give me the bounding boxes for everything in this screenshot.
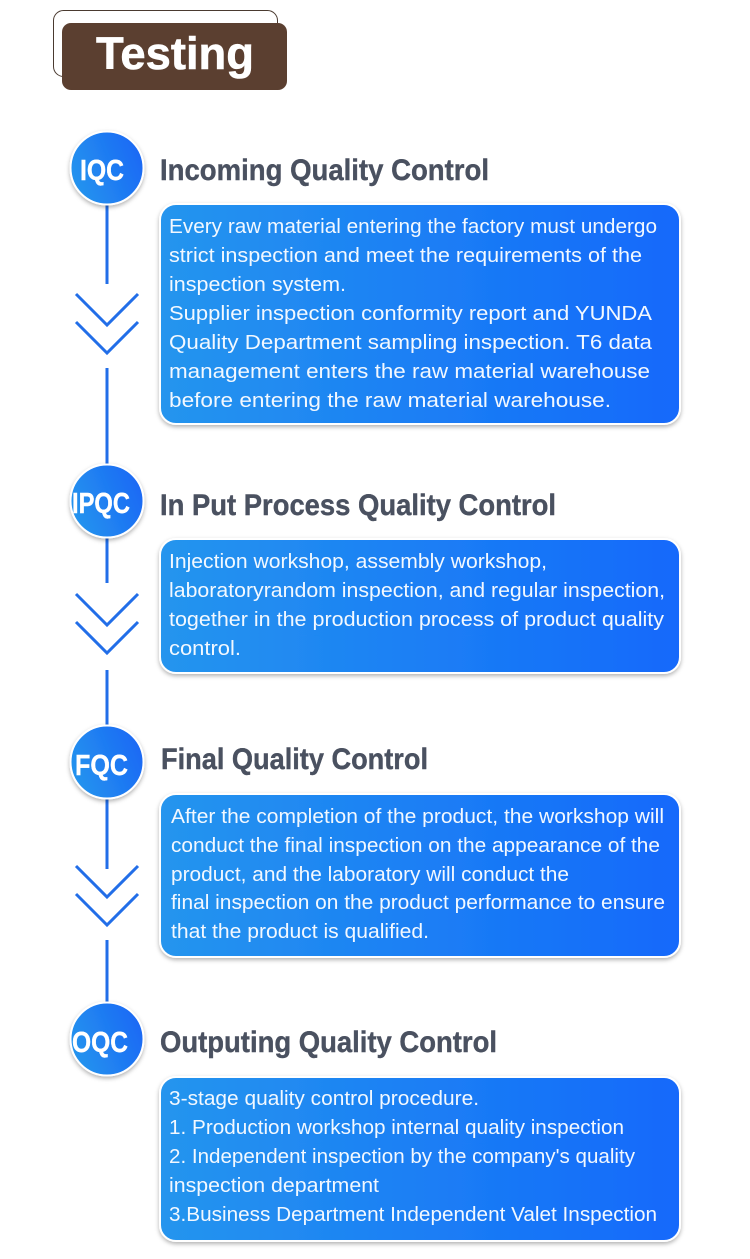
heading: Final Quality Control: Final Quality Control (161, 743, 428, 776)
panel: OQC description: inspection department (169, 1175, 379, 1197)
panel: OQC description: 3.Business Department Independent Valet Inspection (169, 1204, 657, 1226)
panel: IQC description: Every raw material entering the factory must undergo (169, 216, 657, 238)
badge: IQC (70, 132, 144, 204)
panel: IQC description: before entering the raw material warehouse. (169, 390, 611, 412)
panel: OQC description: 2. Independent inspection by the company's quality (169, 1146, 635, 1168)
panel: IPQC description: Injection workshop, assembly workshop, (169, 551, 547, 573)
section: FQC (70, 726, 680, 957)
section: IPQC (70, 464, 680, 673)
panel: FQC description (160, 794, 680, 957)
panel: FQC description: After the completion of the product, the workshop will (171, 806, 664, 828)
section: OQC (70, 1002, 680, 1241)
heading: Outputing Quality Control: Outputing Quality Control (160, 1026, 497, 1059)
panel: FQC description: conduct the final inspection on the appearance of the (171, 835, 660, 857)
section: IQC (70, 132, 680, 424)
badge: OQC: OQC (72, 1027, 128, 1059)
panel: IPQC description: control. (169, 638, 241, 660)
title: Testing (54, 10, 287, 90)
panel: IQC description: Supplier inspection conformity report and YUNDA (169, 303, 653, 325)
badge: FQC (70, 726, 144, 798)
connector: FQC to OQC (76, 798, 138, 1003)
panel: IPQC description: together in the production process of product quality (169, 609, 664, 631)
title: Testing: Testing (96, 28, 254, 79)
panel: IQC description: Quality Department sampling inspection. T6 data (169, 332, 653, 354)
panel: FQC description: final inspection on the product performance to ensure (171, 892, 665, 914)
panel: IPQC description (160, 539, 680, 673)
panel: IPQC description: laboratoryrandom inspection, and regular inspection, (169, 580, 665, 602)
connector: IPQC to FQC (76, 538, 138, 726)
panel: IQC description: strict inspection and meet the requirements of the (169, 245, 642, 267)
panel: IQC description: management enters the raw material warehouse (169, 361, 650, 383)
badge: IPQC (70, 464, 144, 538)
panel: FQC description: product, and the laboratory will conduct the (171, 864, 569, 886)
panel: OQC description: 1. Production workshop internal quality inspection (169, 1117, 624, 1139)
badge: IQC: IQC (80, 155, 124, 187)
heading: In Put Process Quality Control: In Put Process Quality Control (160, 489, 556, 522)
badge: FQC: FQC (75, 750, 128, 782)
badge: IPQC: IPQC (72, 488, 130, 520)
panel: OQC description: 3-stage quality control procedure. (169, 1088, 479, 1110)
panel: FQC description: that the product is qualified. (171, 921, 429, 943)
panel: IQC description: inspection system. (169, 274, 346, 296)
connector: IQC to IPQC (76, 204, 138, 464)
heading: Incoming Quality Control: Incoming Quality Control (160, 154, 489, 187)
panel: OQC description (160, 1077, 680, 1241)
panel: IQC description (160, 204, 680, 424)
badge: OQC (70, 1002, 144, 1076)
